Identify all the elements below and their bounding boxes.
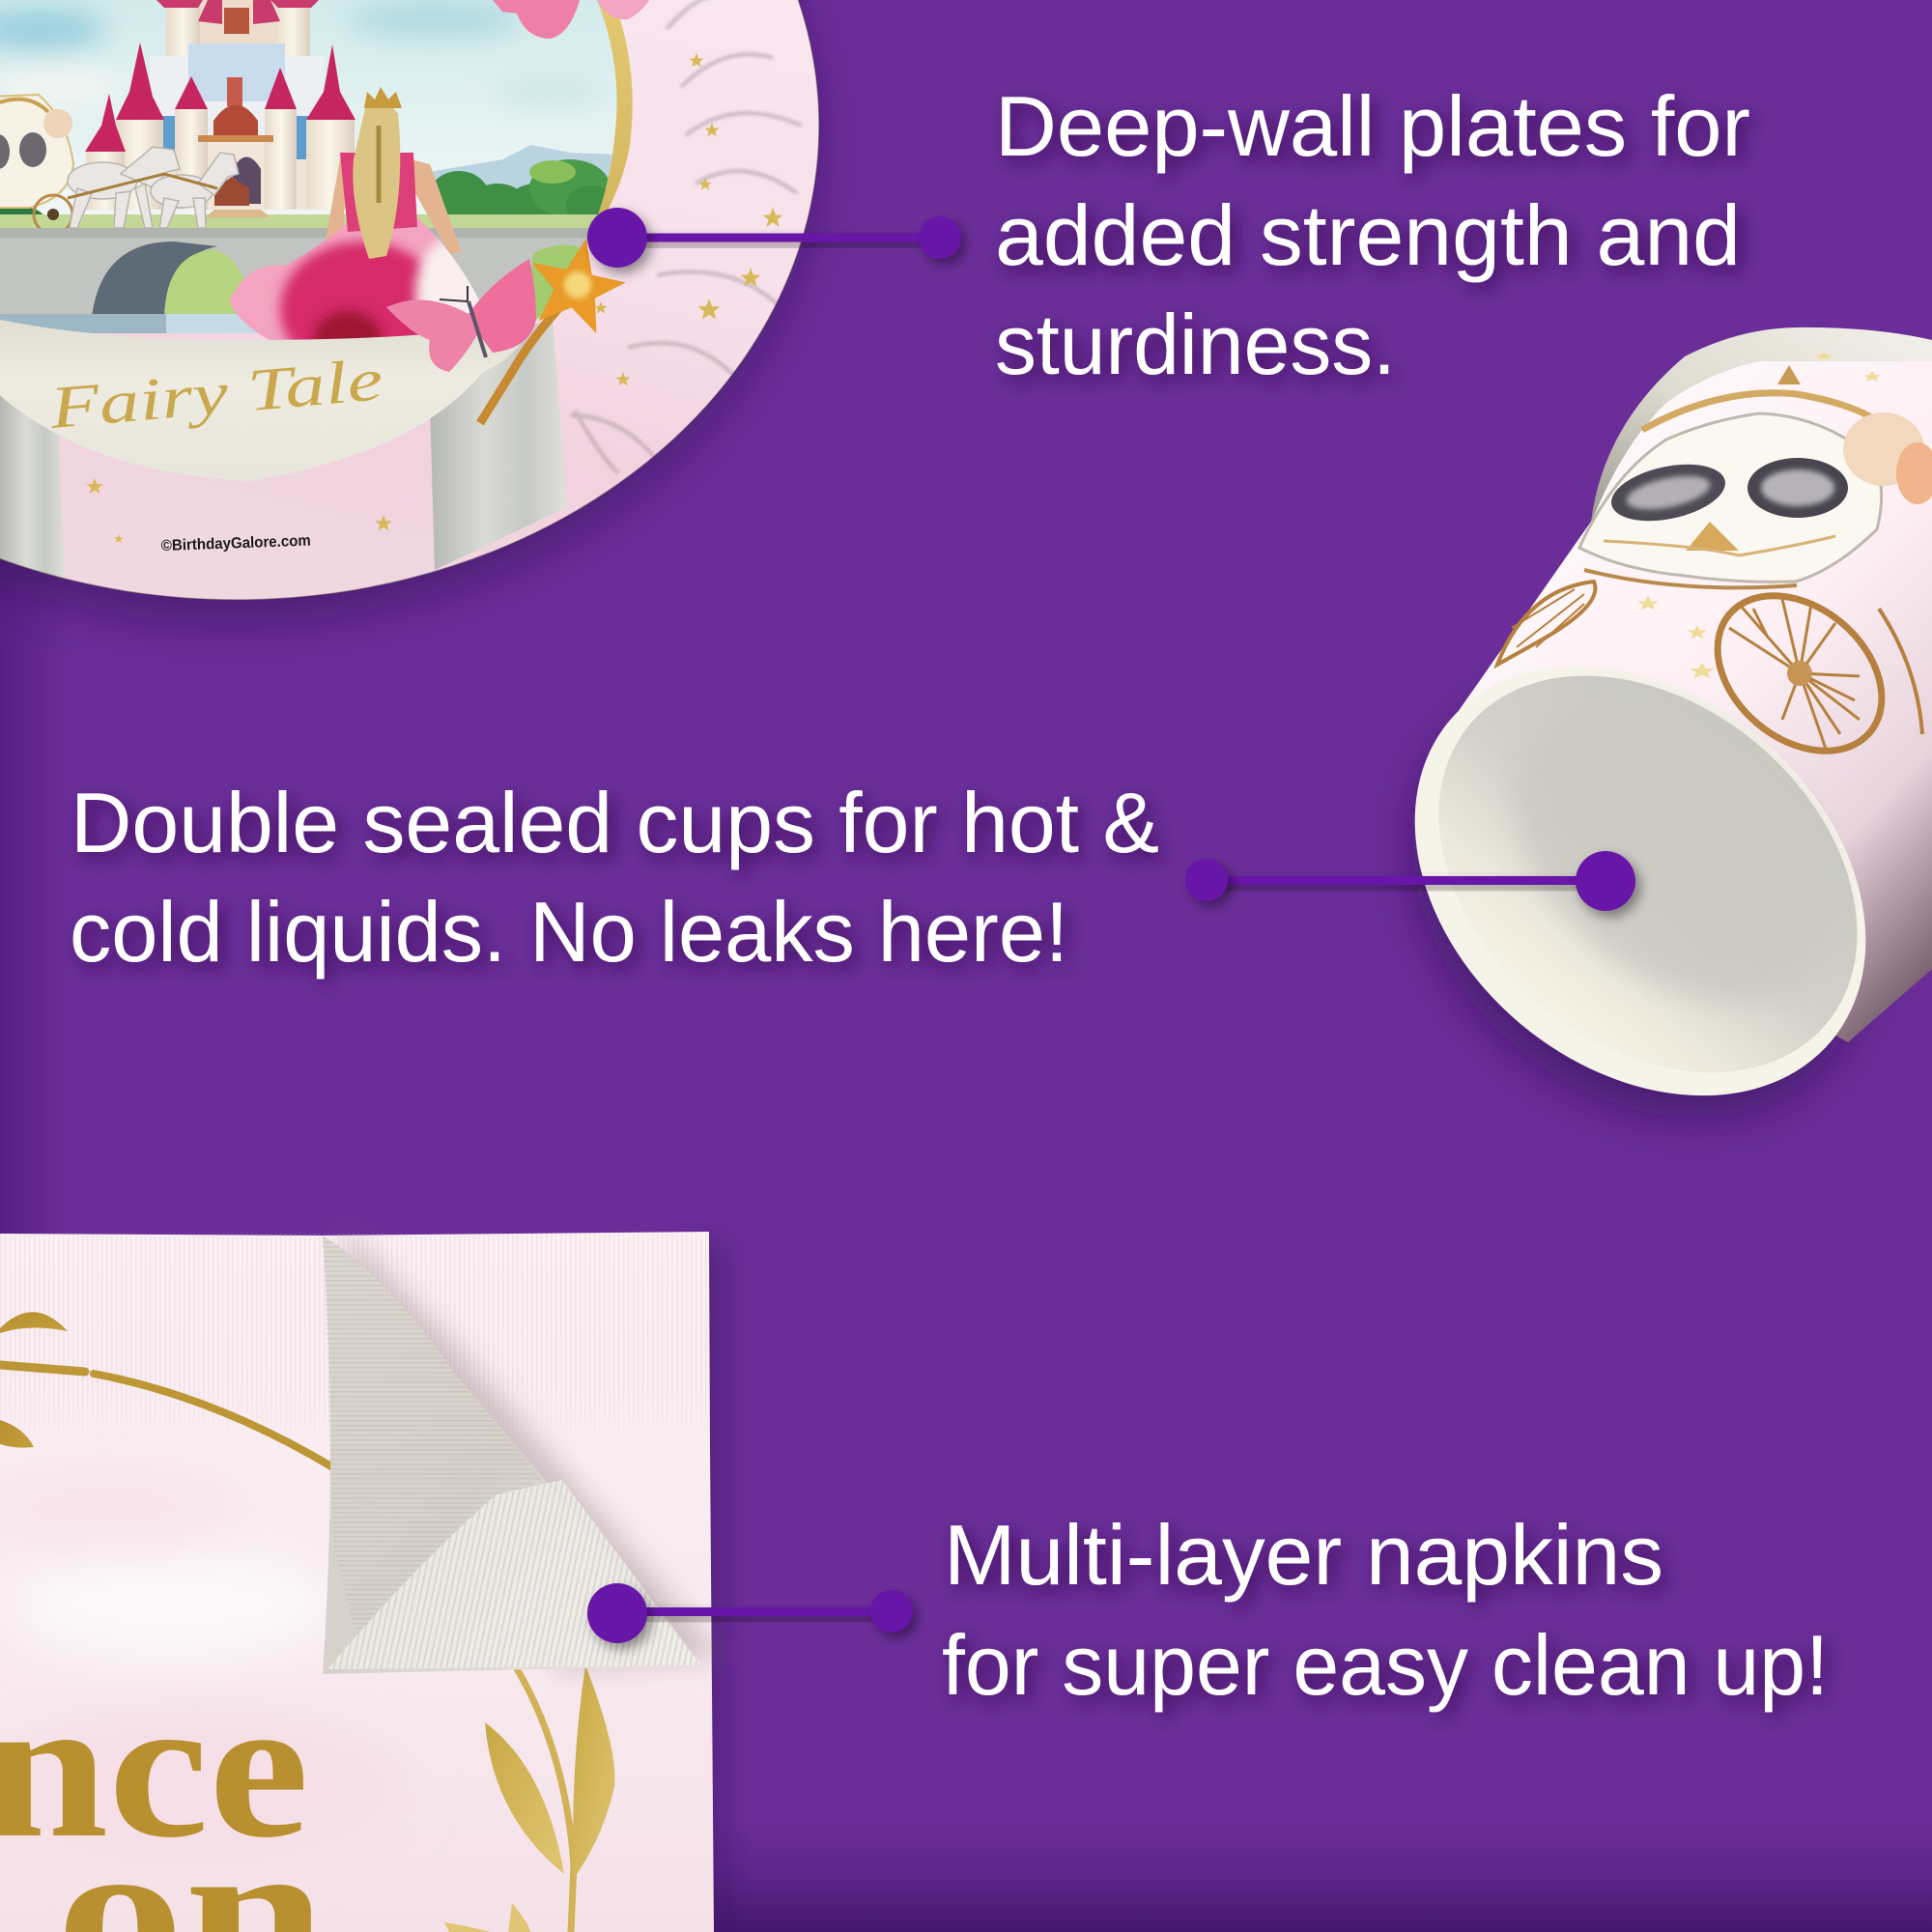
wand: [480, 229, 633, 423]
text: napkin caption: for super easy clean up!: [942, 1617, 1829, 1713]
callout 3: napkin: [587, 1583, 913, 1643]
drape with Fairy Tale: Fairy Tale: [46, 347, 385, 441]
plate body: [0, 0, 869, 628]
rim ridges: [570, 0, 802, 473]
text: plate caption: sturdiness.: [995, 297, 1396, 392]
cup stars: [1637, 352, 1882, 678]
text: napkin caption: Multi-layer napkins: [944, 1507, 1663, 1603]
large dot: [587, 208, 647, 268]
text: plate caption: [995, 78, 1750, 392]
bridge: [0, 228, 628, 325]
scene: [0, 0, 628, 343]
trees: [0, 159, 609, 214]
leader line: [617, 234, 940, 242]
napkin sheet: [0, 1232, 714, 1932]
copyright: ©BirthdayGalore.com: [161, 533, 311, 554]
princess: [222, 87, 502, 377]
cup body: [1449, 361, 1932, 1042]
leader line: [1207, 876, 1605, 885]
folded corner: [323, 1236, 701, 1674]
small dot: [870, 1590, 913, 1633]
castle: [85, 0, 355, 217]
gold plant: [444, 1665, 614, 1932]
drape with Fairy Tale: [0, 314, 533, 481]
gold lettering: [0, 1656, 327, 1932]
text: cup caption: [70, 775, 1159, 980]
text: cup caption: Double sealed cups for hot &: [71, 775, 1159, 870]
carriage print on cup: [1579, 365, 1932, 587]
panel: napkin: [0, 1228, 724, 1932]
horses: [68, 147, 239, 228]
carriage: [0, 95, 73, 234]
rim stars: [39, 53, 782, 543]
curtains: [0, 396, 66, 580]
gold flourish: [0, 1312, 331, 1466]
text: napkin caption: [942, 1507, 1829, 1713]
cup base: [1329, 578, 1932, 1184]
cup shadow: [1327, 601, 1932, 1206]
cup rim: [1591, 327, 1932, 522]
gold ring: [597, 0, 633, 214]
butterfly: [386, 259, 536, 372]
plate edge: [0, 0, 819, 600]
top butterfly: [493, 0, 649, 39]
plate shadow: [0, 0, 816, 623]
panel: paper cup: [1327, 327, 1932, 1206]
large dot: [1576, 851, 1635, 911]
small dot: [1185, 859, 1228, 901]
callout 1: plate: [587, 208, 961, 268]
water: [0, 314, 259, 333]
text: cup caption: cold liquids. No leaks here!: [70, 884, 1068, 980]
leader line: [617, 1607, 892, 1616]
napkin shadow: [676, 1241, 724, 1932]
text: plate caption: added strength and: [995, 187, 1741, 283]
panel: paper plate: [0, 0, 869, 628]
small dot: [919, 216, 961, 259]
mountains: [430, 145, 618, 208]
callout 2: cup: [1185, 851, 1635, 911]
large dot: [587, 1583, 647, 1643]
cup wheels: [1497, 564, 1922, 782]
fold shadow: [342, 1228, 721, 1668]
text: plate caption: Deep-wall plates for: [995, 78, 1750, 174]
